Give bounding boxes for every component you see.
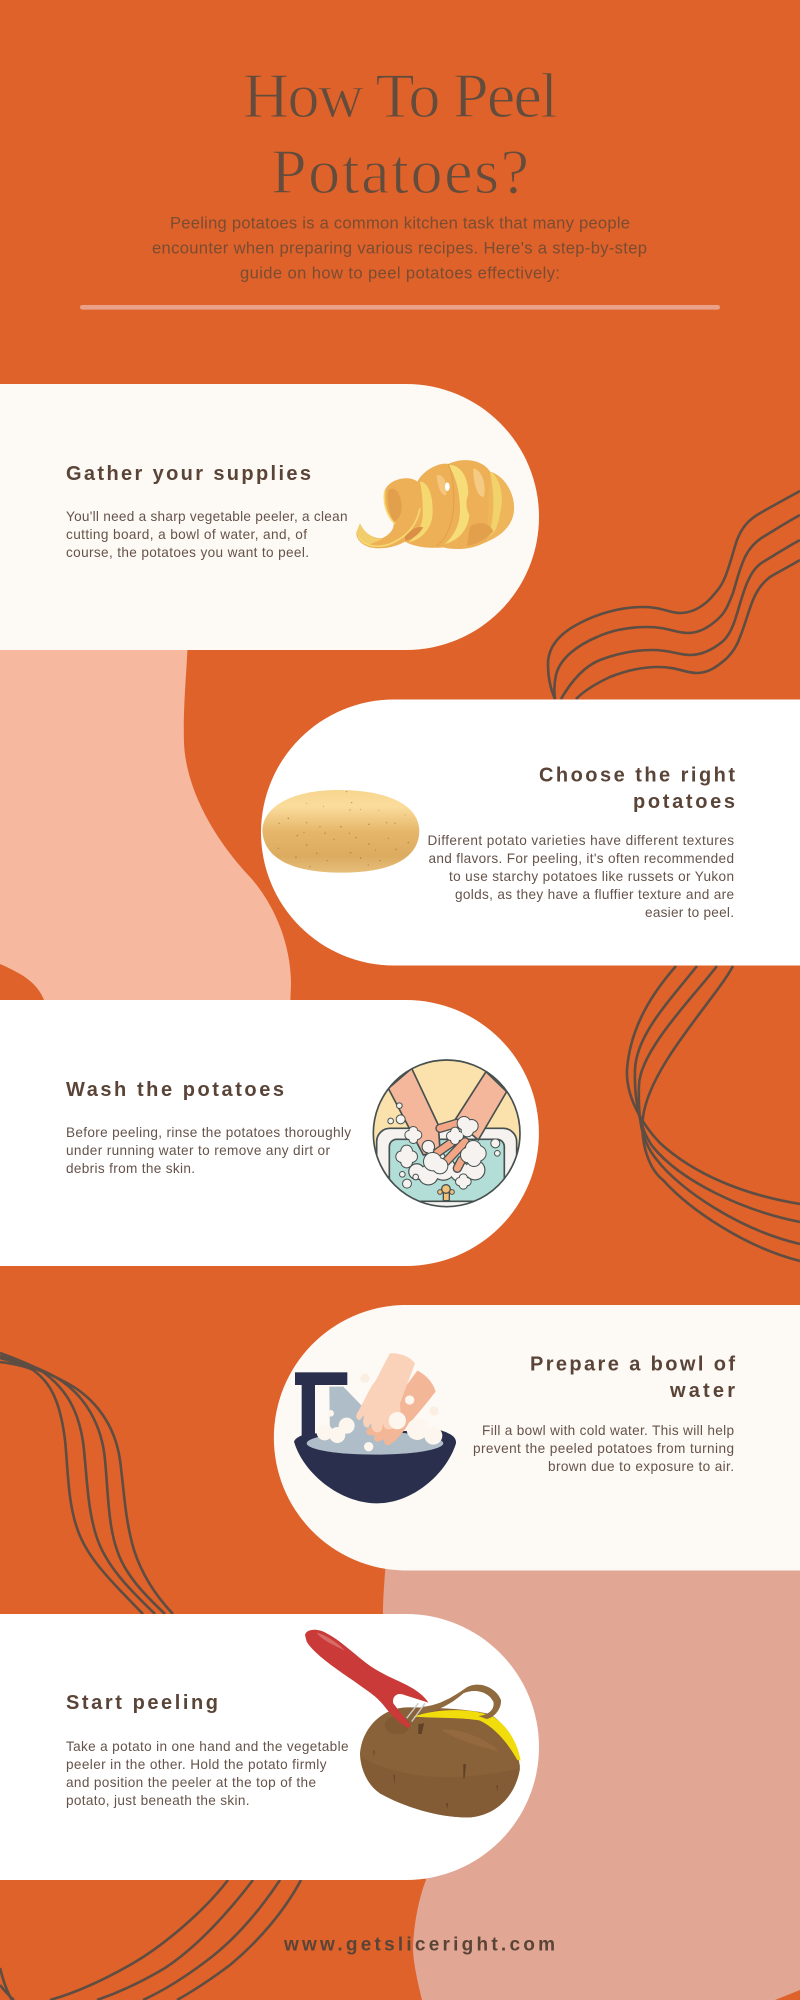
body 4: Fill a bowl with cold water. This will help bbox=[482, 1423, 734, 1438]
heading 1: Gather your supplies bbox=[66, 463, 311, 485]
body 2: and flavors. For peeling, it's often recommended bbox=[428, 851, 734, 866]
heading 4: Prepare a bowl of bbox=[530, 1354, 735, 1376]
icon: hands washing in sink bbox=[372, 1059, 521, 1208]
heading 2: potatoes bbox=[633, 791, 735, 813]
panel: wash the potatoes bbox=[0, 1000, 539, 1266]
body 5: potato, just beneath the skin. bbox=[66, 1793, 250, 1808]
squiggle lines top right bbox=[548, 491, 800, 699]
body 1: course, the potatoes you want to peel. bbox=[66, 545, 309, 560]
body 5: peeler in the other. Hold the potato firmly bbox=[66, 1757, 327, 1772]
title bbox=[243, 60, 558, 207]
panel: start peeling bbox=[0, 1614, 539, 1880]
heading 5: Start peeling bbox=[66, 1692, 218, 1714]
intro text bbox=[152, 214, 647, 282]
intro text: encounter when preparing various recipes. Here's a step-by-step bbox=[152, 238, 647, 258]
panel: choose the right potatoes bbox=[261, 700, 800, 966]
squiggle lines bottom left bbox=[0, 1880, 301, 2000]
intro text: Peeling potatoes is a common kitchen task that many people bbox=[170, 214, 630, 232]
salmon blob right bbox=[383, 1560, 800, 2000]
body 2: to use starchy potatoes like russets or Yukon bbox=[449, 869, 734, 884]
squiggle lines middle left bbox=[0, 1353, 173, 1614]
card 1 bbox=[0, 384, 539, 650]
title: Potatoes? bbox=[271, 136, 529, 207]
card 5 bbox=[0, 1614, 539, 1880]
heading 2: Choose the right bbox=[539, 764, 735, 786]
card 3 bbox=[0, 1000, 539, 1266]
footer website: www.getsliceright.com bbox=[283, 1934, 555, 1956]
body 3: Before peeling, rinse the potatoes thoroughly bbox=[66, 1125, 351, 1140]
body 2: easier to peel. bbox=[645, 905, 734, 920]
icon: whole potato bbox=[262, 790, 419, 873]
heading 4 bbox=[530, 1354, 735, 1402]
panel: prepare a bowl of water bbox=[274, 1305, 800, 1570]
card 4 bbox=[274, 1305, 800, 1570]
body 1: cutting board, a bowl of water, and, of bbox=[66, 527, 307, 542]
body 2: golds, as they have a fluffier texture and are bbox=[455, 887, 734, 902]
heading 2 bbox=[539, 764, 735, 813]
body 3 bbox=[66, 1125, 351, 1176]
title: How To Peel bbox=[243, 60, 558, 131]
panel: gather your supplies bbox=[0, 384, 539, 650]
icon: spiral peeled potato bbox=[356, 460, 514, 549]
body 5: Take a potato in one hand and the vegetable bbox=[66, 1739, 348, 1754]
icon: peeler on brown potato bbox=[305, 1630, 521, 1817]
body 4 bbox=[473, 1423, 734, 1474]
pink blob left bbox=[0, 640, 291, 1010]
body 1 bbox=[66, 509, 348, 560]
icon: hands in bowl with tap bbox=[294, 1353, 456, 1503]
body 1: You'll need a sharp vegetable peeler, a clean bbox=[66, 509, 348, 524]
body 2 bbox=[428, 833, 734, 920]
body 3: under running water to remove any dirt or bbox=[66, 1143, 330, 1158]
body 5: and position the peeler at the top of the bbox=[66, 1775, 316, 1790]
body 5 bbox=[66, 1739, 348, 1808]
body 3: debris from the skin. bbox=[66, 1161, 195, 1176]
body 4: prevent the peeled potatoes from turning bbox=[473, 1441, 734, 1456]
heading 3: Wash the potatoes bbox=[66, 1079, 284, 1101]
body 2: Different potato varieties have different textures bbox=[428, 833, 734, 848]
heading 4: water bbox=[669, 1380, 735, 1402]
squiggle lines middle right bbox=[627, 966, 800, 1261]
body 4: brown due to exposure to air. bbox=[548, 1459, 734, 1474]
intro text: guide on how to peel potatoes effectively: bbox=[240, 264, 560, 282]
divider bbox=[80, 305, 720, 310]
card 2 bbox=[261, 700, 800, 966]
